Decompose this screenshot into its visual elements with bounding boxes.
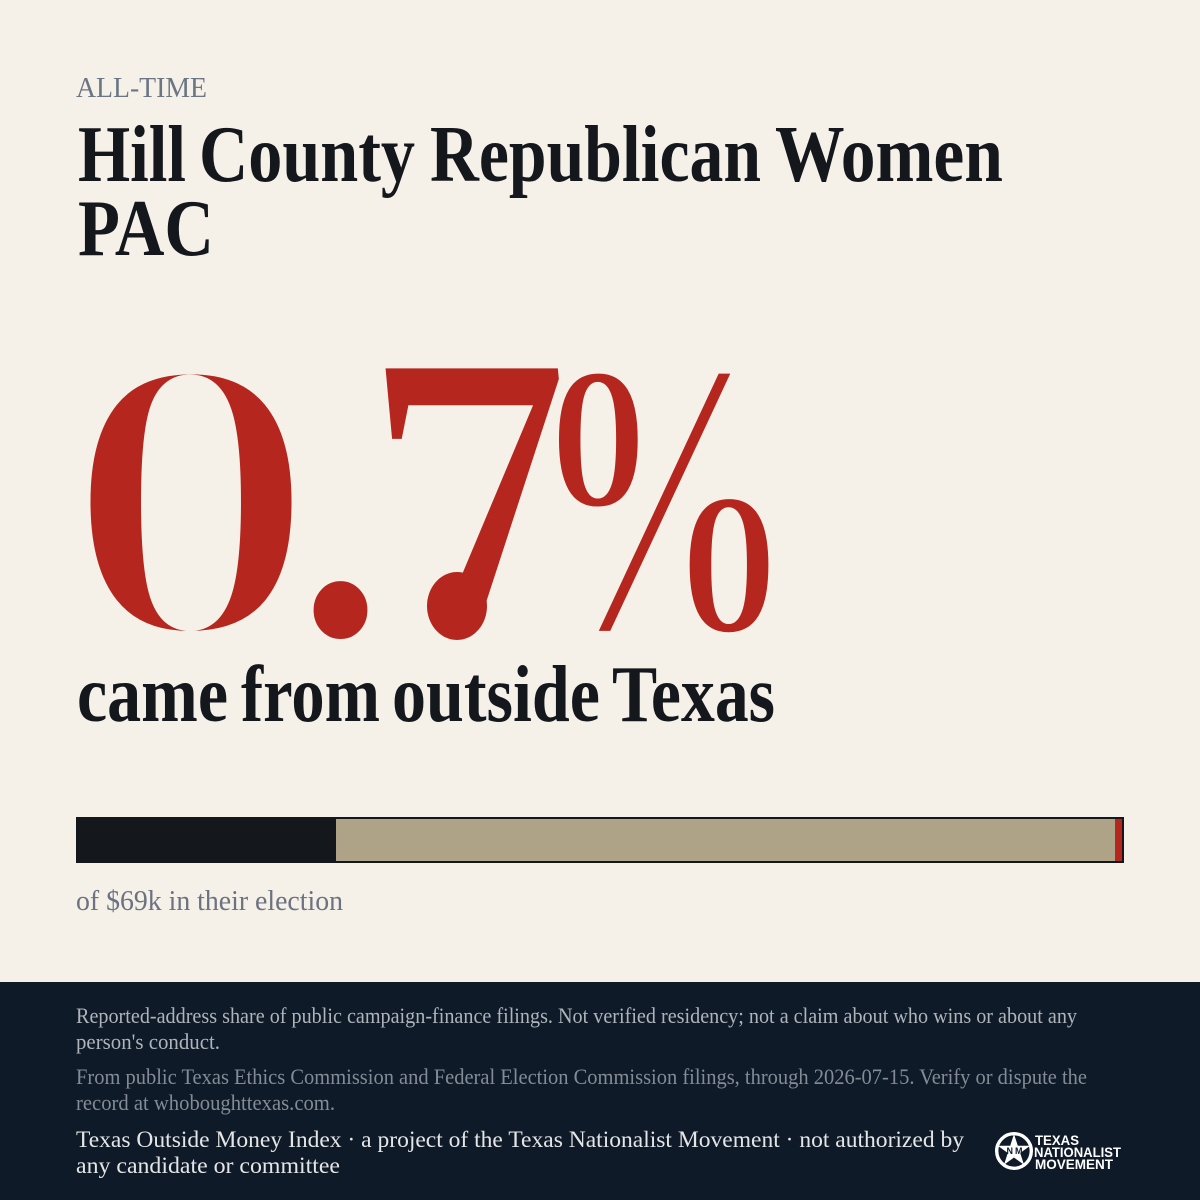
title: Women: [775, 111, 1003, 199]
big percentage: [90, 368, 768, 640]
title: PAC: [78, 185, 214, 273]
big percentage: .: [299, 317, 382, 712]
title: [78, 111, 1003, 273]
logo wordmark: [1034, 1132, 1121, 1172]
logo wordmark: MOVEMENT: [1035, 1156, 1113, 1172]
bar caption: of $69k in their election: [76, 885, 343, 917]
eyebrow: ALL-TIME: [76, 73, 207, 104]
disclaimer text: [76, 1003, 1077, 1054]
subheading: came: [77, 651, 228, 739]
source text: record at whoboughttexas.com.: [76, 1090, 335, 1115]
icon: star in circle: [997, 1134, 1031, 1168]
subheading: Texas: [612, 651, 775, 739]
icon: star in circle: N: [1006, 1146, 1013, 1156]
disclaimer text: person's conduct.: [76, 1029, 220, 1054]
title: Republican: [430, 111, 761, 199]
credit text: Texas Outside Money Index · a project of the Texas Nationalist Movement · not authorized by: [76, 1127, 964, 1152]
title: County: [199, 111, 415, 199]
icon: star in circle: M: [1015, 1146, 1022, 1156]
subheading: from: [241, 651, 380, 739]
disclaimer text: Reported-address share of public campaign-finance filings. Not verified residency; not a claim about who wins or about any: [76, 1003, 1077, 1028]
big percentage: 7: [346, 263, 608, 739]
subheading: [77, 651, 775, 739]
logo: [997, 1132, 1121, 1172]
credit text: [76, 1127, 964, 1178]
source text: [76, 1064, 1087, 1115]
logo wordmark: TEXAS: [1035, 1132, 1079, 1148]
credit text: any candidate or committee: [76, 1153, 340, 1178]
big percentage: %: [528, 279, 797, 718]
progress bar: [76, 817, 1124, 863]
big percentage: 0: [57, 272, 325, 726]
subheading: outside: [392, 651, 600, 739]
logo wordmark: NATIONALIST: [1034, 1144, 1121, 1160]
source text: From public Texas Ethics Commission and Federal Election Commission filings, through 2026-07-15. Verify or dispute the: [76, 1064, 1087, 1089]
title: Hill: [78, 111, 186, 199]
footer panel: [0, 982, 1200, 1200]
